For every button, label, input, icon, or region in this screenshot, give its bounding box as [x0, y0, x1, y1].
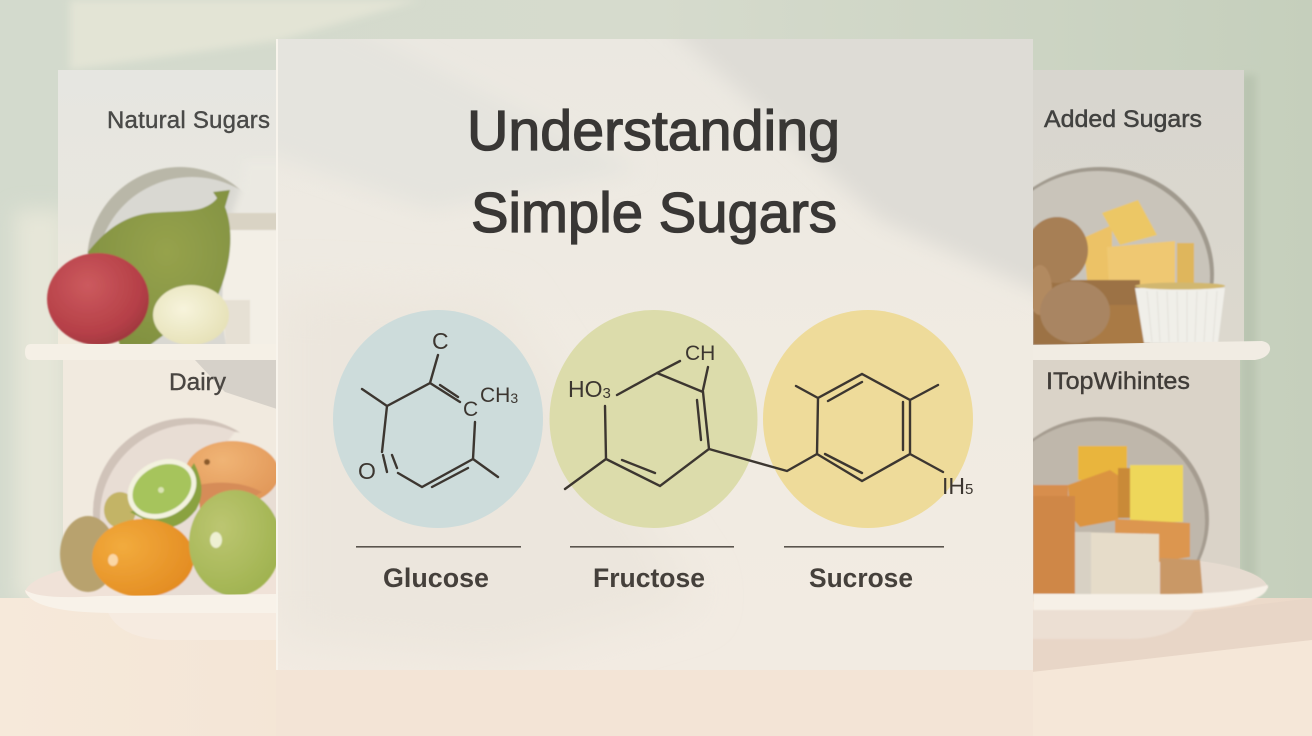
plate surface: right	[1240, 569, 1268, 588]
panel: toppings	[1033, 360, 1268, 638]
molecule: fructose	[565, 361, 817, 489]
label: Added Sugars: Added Sugars	[1044, 106, 1202, 133]
circle: sucrose	[763, 310, 973, 528]
fruit bowl	[59, 418, 276, 596]
plate: left	[25, 590, 280, 640]
shelf: left upper	[25, 344, 280, 360]
title: Understanding	[467, 99, 840, 163]
molecule labels: glucose: O	[358, 458, 376, 484]
glucose column	[333, 310, 543, 593]
molecule label: sucrose: IH5	[942, 473, 973, 499]
molecule labels: fructose	[568, 342, 715, 402]
label: Glucose: Glucose	[383, 563, 489, 593]
sugars: coloured cubes	[1033, 416, 1267, 595]
label: Fructose: Fructose	[593, 563, 705, 593]
label: ITopWihintes: ITopWihintes	[1046, 368, 1190, 395]
fructose column	[550, 310, 973, 593]
label: Natural Sugars: Natural Sugars	[107, 107, 270, 134]
sucrose column	[784, 374, 973, 593]
rule: fructose	[570, 546, 734, 548]
plate surface: left	[25, 570, 63, 597]
panel: natural sugars	[46, 70, 276, 344]
plate: right	[1030, 585, 1268, 639]
circle: fructose	[550, 310, 758, 528]
molecule labels: fructose: CH	[685, 342, 715, 365]
molecule labels: glucose: C	[432, 328, 449, 354]
main card	[276, 39, 1033, 670]
fruit: apple, pear, onion and jar	[46, 166, 276, 344]
molecule labels: glucose: 3	[510, 390, 518, 406]
molecule labels: glucose: CH	[480, 384, 510, 407]
title	[467, 99, 840, 245]
light and shadow bands on card	[358, 39, 1033, 290]
label: Dairy: Dairy	[169, 369, 226, 396]
label: Sucrose: Sucrose	[809, 563, 913, 593]
sugars: brown lumps, yellow cubes and cup	[1033, 166, 1226, 345]
panel: dairy	[25, 360, 292, 640]
molecule: glucose	[362, 355, 498, 487]
rule: sucrose	[784, 546, 944, 548]
molecule: sucrose	[796, 374, 943, 481]
molecule labels: glucose	[358, 328, 518, 484]
rule: glucose	[356, 546, 521, 548]
title: Simple Sugars	[471, 181, 837, 245]
shelf: right upper	[1030, 341, 1270, 360]
molecule labels: fructose: HO	[568, 376, 602, 402]
molecule labels: glucose: C	[463, 398, 478, 421]
circle: glucose	[333, 310, 543, 528]
panel: added sugars	[1033, 70, 1244, 345]
molecule labels: fructose: 3	[602, 385, 611, 402]
